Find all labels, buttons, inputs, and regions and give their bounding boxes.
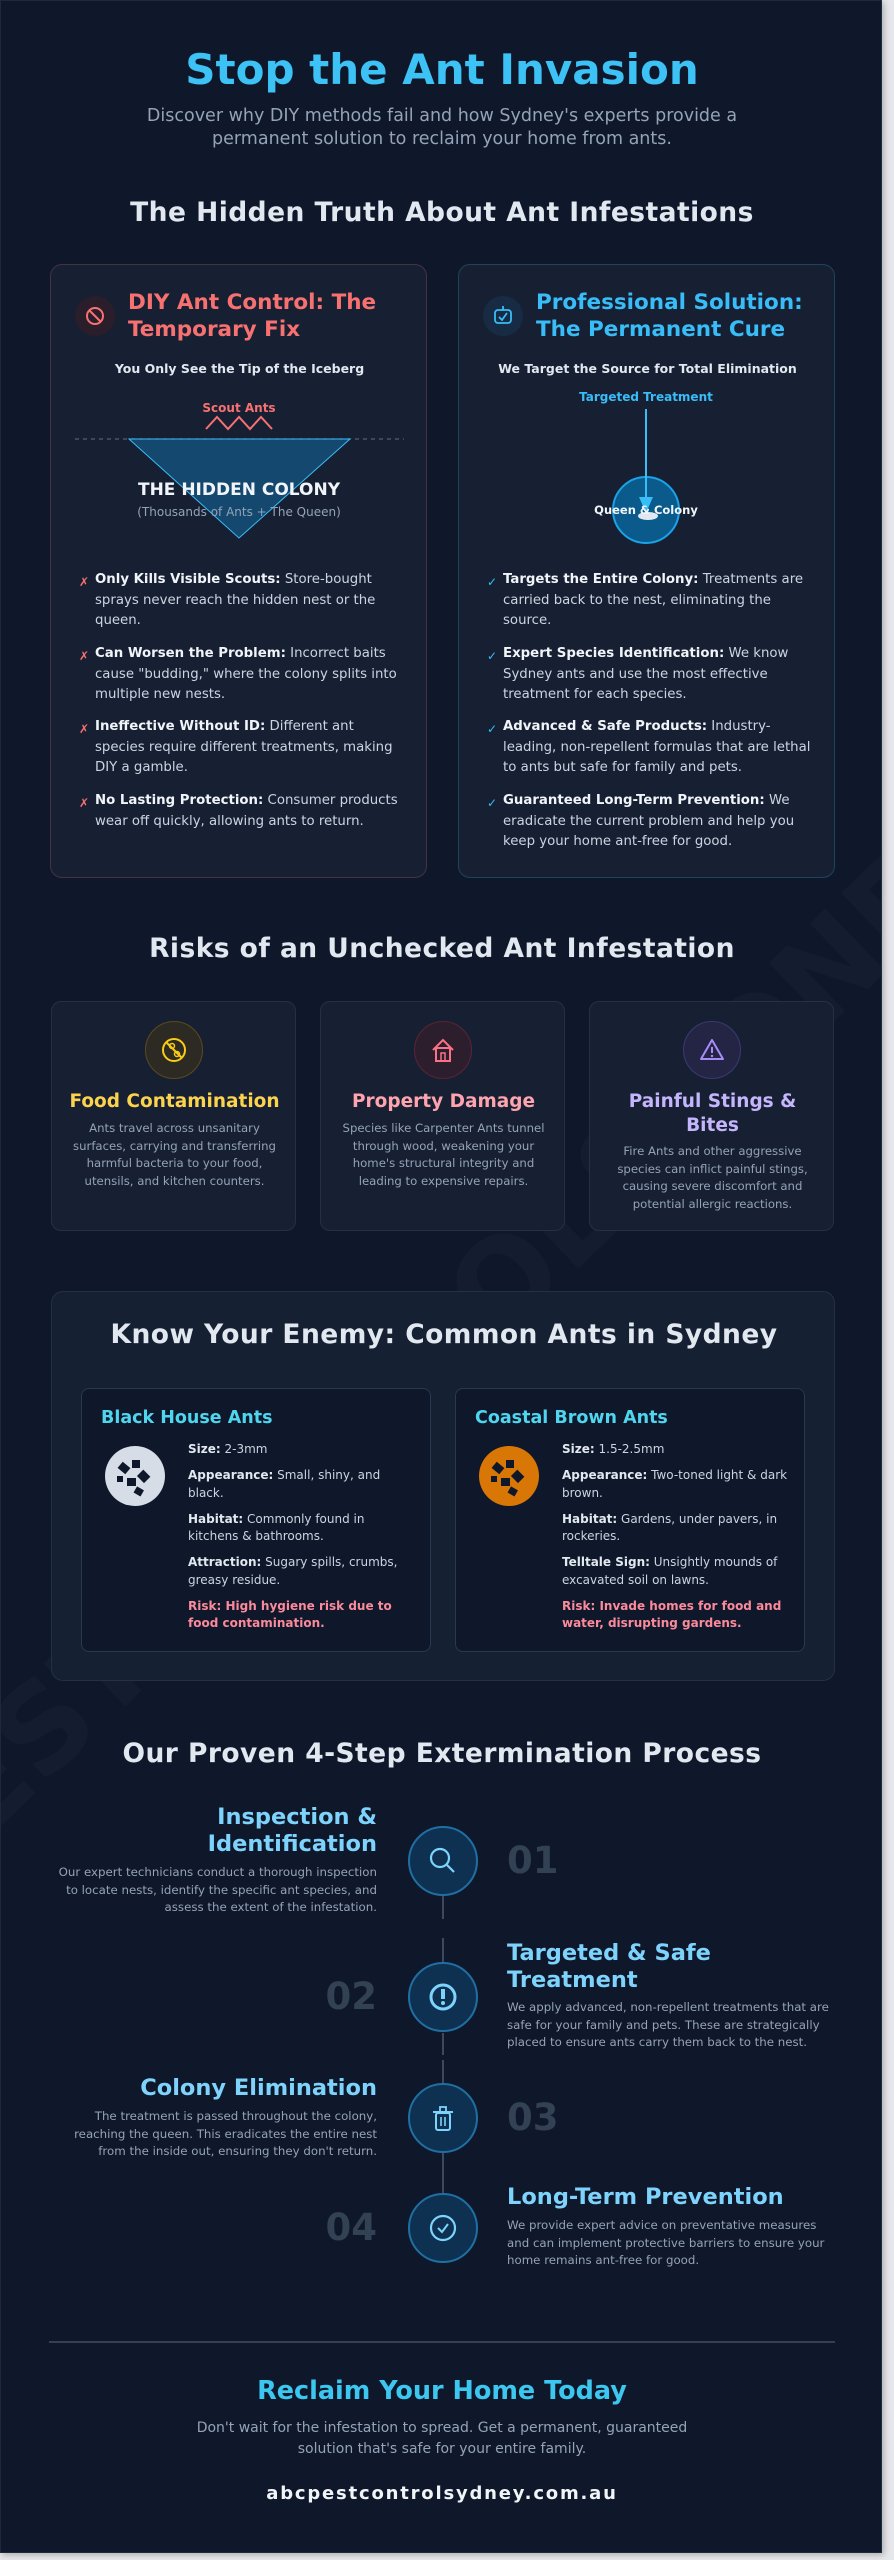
property title: Property Damage xyxy=(352,1091,535,1112)
icon: trash xyxy=(408,2083,478,2153)
panel: professional: ✓ xyxy=(487,722,497,736)
stings title: Painful Stings & Bites xyxy=(629,1091,796,1136)
target diagram: Targeted Treatment xyxy=(579,390,713,404)
icon: check xyxy=(408,2193,478,2263)
black ant facts: Risk: High hygiene risk due to food contamination. xyxy=(188,1598,392,1630)
icon: search xyxy=(408,1826,478,1896)
brown ant facts: Telltale Sign: Unsightly mounds of excavated soil on lawns. xyxy=(562,1555,777,1586)
step 4 xyxy=(326,2184,824,2267)
pro subheading: We Target the Source for Total Elimination xyxy=(498,361,797,376)
brown ant facts: Size: 1.5-2.5mm xyxy=(562,1442,664,1456)
brown ant facts: Risk: Invade homes for food and water, disrupting gardens. xyxy=(562,1598,781,1630)
iceberg diagram xyxy=(75,401,404,538)
brown ant facts: Habitat: Gardens, under pavers, in rockeries. xyxy=(562,1512,777,1543)
panel: professional: ✓ xyxy=(487,649,497,663)
step 3 text: The treatment is passed throughout the colony, reaching the queen. This eradicates the entire nest from the inside out, ensuring they don't return. xyxy=(74,2109,377,2158)
black ant facts: Size: 2-3mm xyxy=(188,1442,267,1456)
step 1 text: Our expert technicians conduct a thorough inspection to locate nests, identify the specific ant species, and assess the extent of the infestation. xyxy=(59,1865,377,1914)
icon: alert xyxy=(408,1962,478,2032)
step 2 title: Targeted & Safe Treatment xyxy=(507,1940,711,1993)
number 02: 02 xyxy=(326,1975,377,2018)
step 3 title: Colony Elimination xyxy=(140,2075,377,2101)
panel: DIY xyxy=(50,264,427,878)
footer CTA xyxy=(197,2376,687,2504)
target diagram: Queen & Colony xyxy=(594,503,698,517)
brown ant facts: Appearance: Two-toned light & dark brown. xyxy=(562,1468,787,1500)
black ant title: Black House Ants xyxy=(101,1408,273,1428)
panel: professional: Guaranteed Long-Term Prevention: We eradicate the current problem and help you keep your home ant-free for good. xyxy=(503,793,794,849)
step 2 text: We apply advanced, non-repellent treatments that are safe for your family and pets. These are strategically placed to ensure ants carry them back to the nest. xyxy=(507,2000,829,2049)
black ant facts: black. xyxy=(188,1486,224,1500)
panel: professional xyxy=(458,264,835,878)
panel: DIY: Ineffective Without ID: Different ant species require different treatments, making DIY a gamble. xyxy=(95,719,393,775)
black ant facts: Attraction: Sugary spills, crumbs, greasy residue. xyxy=(188,1555,397,1586)
icon: prohibited xyxy=(75,296,115,336)
subtitle: Discover why DIY methods fail and how Sydney's experts provide a permanent solution to reclaim your home from ants. xyxy=(147,106,737,149)
panel: DIY: No Lasting Protection: Consumer products wear off quickly, allowing ants to return. xyxy=(95,793,398,829)
risk card: food xyxy=(51,1001,296,1231)
CTA heading: Reclaim Your Home Today xyxy=(257,2376,627,2406)
CTA text: Don't wait for the infestation to spread. Get a permanent, guaranteed solution that's safe for your entire family. xyxy=(197,2420,687,2457)
panel: professional: Expert Species Identification: We know Sydney ants and use the most effective treatment for each species. xyxy=(503,646,788,702)
panel: know your enemy xyxy=(51,1291,835,1681)
icon: warning xyxy=(683,1021,741,1079)
card: black house ants xyxy=(81,1388,431,1652)
DIY list: ✗ xyxy=(79,575,89,589)
pro list: Targets the Entire Colony: Treatments are carried back to the nest, eliminating the source. xyxy=(503,572,803,628)
step 1 title: Inspection & Identification xyxy=(208,1804,377,1857)
step 4 title: Long-Term Prevention xyxy=(507,2184,784,2210)
pro list: ✓ xyxy=(487,575,497,589)
property text: Species like Carpenter Ants tunnel through wood, weakening your home's structural integrity and leading to expensive repairs. xyxy=(343,1121,544,1188)
iceberg diagram: THE HIDDEN COLONY xyxy=(138,480,341,500)
iceberg diagram: Scout Ants xyxy=(202,401,276,415)
target diagram xyxy=(579,390,713,544)
enemy heading: Know Your Enemy: Common Ants in Sydney xyxy=(110,1319,778,1350)
website: abcpestcontrolsydney.com.au xyxy=(266,2483,618,2504)
stings text: Fire Ants and other aggressive species can inflict painful stings, causing severe discomfort and potential allergic reactions. xyxy=(617,1144,808,1211)
number 01: 01 xyxy=(507,1839,558,1882)
DIY title: DIY Ant Control: The Temporary Fix xyxy=(128,290,376,342)
panel: DIY: ✗ xyxy=(79,796,89,810)
heading: risks: Risks of an Unchecked Ant Infestation xyxy=(149,933,735,964)
step 3 xyxy=(74,2075,558,2158)
pro title: Professional Solution: The Permanent Cure xyxy=(536,290,803,342)
DIY subheading: You Only See the Tip of the Iceberg xyxy=(115,361,364,376)
number 03: 03 xyxy=(507,2096,558,2139)
food text: Ants travel across unsanitary surfaces, carrying and transferring harmful bacteria to your food, utensils, and kitchen counters. xyxy=(73,1121,276,1188)
black ant facts xyxy=(188,1442,397,1630)
panel: professional: ✓ xyxy=(487,796,497,810)
icon: bacteria xyxy=(145,1021,203,1079)
risk card: property xyxy=(320,1001,565,1231)
heading: process: Our Proven 4-Step Extermination Process xyxy=(123,1738,761,1769)
black ant facts: Appearance: Small, shiny, and xyxy=(188,1468,380,1482)
title: Stop the Ant Invasion xyxy=(185,45,699,94)
panel: DIY: ✗ xyxy=(79,649,89,663)
step 1 xyxy=(59,1804,558,1914)
heading: hidden truth: The Hidden Truth About Ant Infestations xyxy=(130,197,754,228)
panel: professional: Advanced & Safe Products: Industry-leading, non-repellent formulas that are lethal to ants but safe for family and pets. xyxy=(503,719,810,775)
icon: timer check xyxy=(483,296,523,336)
icon: house xyxy=(414,1021,472,1079)
step 4 text: We provide expert advice on preventative measures and can implement protective barriers to ensure your home remains ant-free for good. xyxy=(507,2218,824,2267)
icon: black ant xyxy=(105,1446,165,1506)
risk card: stings xyxy=(589,1001,834,1231)
food title: Food Contamination xyxy=(69,1091,280,1112)
step 2 xyxy=(326,1940,829,2049)
iceberg diagram: (Thousands of Ants + The Queen) xyxy=(137,505,341,519)
brown ant title: Coastal Brown Ants xyxy=(475,1408,668,1428)
card: coastal brown ants xyxy=(455,1388,805,1652)
panel: DIY: ✗ xyxy=(79,722,89,736)
brown ant facts xyxy=(562,1442,787,1630)
DIY list: Only Kills Visible Scouts: Store-bought sprays never reach the hidden nest or the queen. xyxy=(95,572,375,628)
panel: DIY: Can Worsen the Problem: Incorrect baits cause "budding," where the colony splits into multiple new nests. xyxy=(95,646,397,702)
number 04: 04 xyxy=(326,2206,377,2249)
black ant facts: Habitat: Commonly found in kitchens & bathrooms. xyxy=(188,1512,364,1543)
icon: brown ant xyxy=(479,1446,539,1506)
